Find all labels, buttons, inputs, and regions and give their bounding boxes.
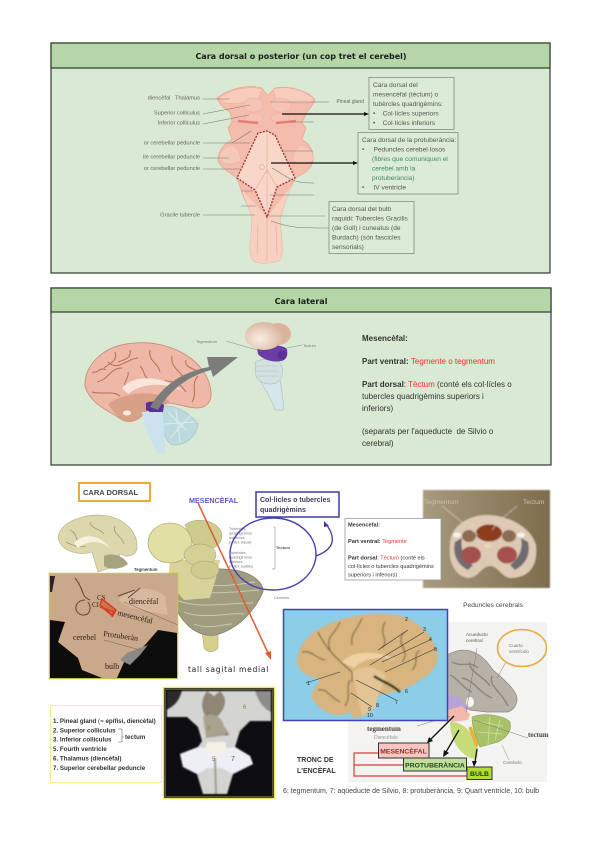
right sagittal brain illustration (348, 622, 547, 782)
list: numbered structures: 7. Superior cerebellar peduncle (53, 765, 146, 772)
dashed outline: fourth ventricle (237, 131, 295, 217)
tag: bulb (467, 767, 492, 780)
bracket: tronc de l'encèfal (354, 753, 467, 776)
callout: bulb: raquidi: Tubercles Gracilis (332, 216, 409, 222)
label: tectum: Tectum (303, 343, 317, 348)
callout: tectum: • Col·lícles inferiors (373, 120, 436, 127)
labels: specimen numbers: 2 (206, 712, 209, 718)
label: tegmentum: Tegmentum (134, 567, 158, 572)
illustration: isolated brainstem (226, 322, 302, 410)
heading: cara dorsal (51, 43, 550, 68)
left labels: Pineal gland (336, 99, 364, 105)
heading: cara dorsal: Cara dorsal o posterior (un cop tret el cerebel) (195, 52, 407, 61)
caption: numbered legend: 6: tegmentum, 7: aqüeducte de Silvio, 8: protuberància, 9: Quart ventricle, 10: bulb (283, 788, 539, 795)
labels on cross-section: Tectum (523, 499, 545, 506)
callout: bulb: (de Goll) i cuneatus (de (332, 225, 401, 232)
callout: tectum: mesencèfal (téctum) o (373, 92, 439, 98)
left labels: or cerebellar peduncle (144, 166, 200, 172)
labels: numbers: 6 (405, 689, 408, 695)
labels: numbers: 8 (376, 703, 379, 709)
labels: right illustration: tegmentum (367, 725, 401, 733)
callout: mesencèfal summary: col·lícles o tubercles quadrigèmins (348, 564, 434, 570)
label: protuberància: Protuberàn (103, 629, 139, 643)
callout: col·licles o tubercles quadrigèmins: Col·licles o tubercles (260, 497, 331, 504)
callout: mesencèfal summary: Mesencèfal: (348, 522, 380, 528)
heading: tronc de l'encèfal: TRONC DE (297, 757, 334, 764)
left labels: Inferior colliculus (158, 120, 200, 126)
labels: specimen numbers: 4 (225, 732, 228, 738)
arrow: curved to col·licles box (316, 521, 332, 556)
callout: tectum: Cara dorsal del (373, 82, 418, 89)
photo: sagittal brain in blue frame (284, 610, 448, 720)
tectum annotation: superiors (229, 536, 245, 540)
panel: cara dorsal o posterior (51, 43, 550, 273)
text block: mesencèfal: Part dorsal: Tèctum (conté els col·lícles o (362, 380, 512, 389)
text block: mesencèfal: (separats per l'aqueducte de Silvio o (362, 427, 494, 436)
text block: mesencèfal: inferiors) (362, 404, 393, 413)
photo: midbrain cross-section (423, 490, 550, 588)
label: bulb: bulb (105, 662, 119, 671)
callout: bulb: Cara dorsal del bulb (332, 206, 391, 213)
text block: mesencèfal: Mesencèfal: (362, 334, 408, 343)
arrow: to tectum box (282, 112, 369, 116)
left labels: Gracile tubercle (160, 212, 200, 218)
panel: cara lateral (51, 288, 551, 465)
labels: specimen numbers (206, 705, 247, 763)
labels: right illustration: Diencéfalo (374, 735, 398, 741)
labels: right illustration: Cuarto (509, 643, 523, 648)
list: numbered structures: 1. Pineal gland (= epífisi, diencèfal) (53, 718, 156, 725)
highlight: tectum ellipse (230, 518, 316, 590)
illustration: whole brain section (58, 515, 137, 572)
tectum annotation: quadrigèmins (229, 556, 252, 560)
callout: protuberance (358, 132, 458, 194)
tectum annotation: Tectum (276, 545, 290, 550)
tectum annotation: (reflex auditiu) (229, 564, 254, 568)
illustration: olive brainstem with cerebellum (148, 520, 263, 652)
illustration: sagittal brain (85, 343, 211, 453)
label: CS and CI: CS (97, 594, 106, 602)
labels: right illustration: tectum (528, 731, 549, 739)
label: tegmentum: Tegmentum (196, 339, 218, 344)
labels: numbers: 5 (434, 647, 437, 653)
labels: numbers: 2 (405, 617, 408, 623)
labels: right illustration: Cerebelo (503, 760, 522, 765)
photo: sagittal section in yellow frame (50, 574, 178, 678)
tag: mesencèfal: MESENCÈFAL (380, 746, 427, 756)
left labels: or cerebellar peduncle (144, 140, 200, 146)
list: numbered structures (50, 706, 162, 782)
labels: right illustration (367, 632, 549, 765)
labels on cross-section (424, 499, 545, 506)
highlight: colliculi (100, 599, 116, 617)
labels: numbers: 7 (395, 700, 398, 706)
heading: cara lateral (51, 288, 551, 312)
arrow: to protuberance box (271, 161, 358, 165)
label: cerebel: cerebel (73, 633, 97, 642)
labels: right illustration: cerebral (466, 638, 483, 643)
labels: specimen numbers: 5 (212, 757, 216, 763)
tectum annotation: Tubèrcles (229, 551, 246, 555)
tag: protuberància: PROTUBERÀNCIA (405, 760, 465, 770)
left labels (143, 96, 364, 218)
list: numbered structures: 6. Thalamus (diencèfal) (53, 756, 121, 762)
arrow: to mesencèfal tag (427, 716, 454, 743)
labels on cross-section: Tegmentum (424, 499, 459, 506)
list: numbered structures: 2. Superior colliculus (53, 728, 116, 734)
labels: numbers (307, 617, 437, 719)
labels: numbers: 3 (423, 627, 426, 633)
labels: numbers: 10 (367, 713, 373, 719)
labels: numbers: 1 (307, 681, 310, 687)
label: cara dorsal: CARA DORSAL (83, 488, 139, 497)
photo: dorsal brainstem specimen (164, 688, 274, 798)
arrow: to protuberància tag (443, 730, 459, 757)
labels: specimen numbers: 3 (207, 726, 211, 732)
text block: mesencèfal: cerebral) (362, 439, 394, 448)
tag: mesencèfal (378, 743, 429, 758)
callout: col·licles o tubercles quadrigèmins: quadrigèmins (260, 507, 306, 514)
label: diencèfal: diencèfal (129, 597, 159, 606)
callout: bulb: Burdach) (són fascicles (332, 234, 401, 242)
left labels: diencèfal Thalamus (148, 96, 200, 102)
arrow: red sagittal plane (198, 503, 271, 660)
callout: protuberance: Cara dorsal de la protuberància: (362, 137, 456, 144)
heading: tronc de l'encèfal: L'ENCÈFAL (297, 766, 336, 775)
text block: mesencèfal (362, 334, 512, 448)
list: numbered structures: 3. Inferior colliculus (53, 736, 112, 744)
highlight: cuarto ventrículo ellipse (498, 630, 546, 666)
tectum annotation: Tubèrcles (229, 527, 246, 531)
tag: protuberància (404, 758, 466, 771)
label: cara dorsal (79, 483, 150, 501)
callout: protuberance: protuberància) (372, 175, 415, 182)
callout: protuberance: • IV ventricle (362, 184, 406, 192)
labels: numbers: 9 (368, 707, 371, 713)
heading: mesencèfal: MESENCÈFAL (189, 496, 239, 505)
callout: bulb: sensorials) (332, 244, 364, 251)
callout: tectum: tubèrcles quadrigèmins: (373, 101, 443, 108)
callout: protuberance: cerebel amb la (372, 166, 416, 172)
labels: numbers: 4 (429, 637, 432, 643)
labels: specimen numbers: 7 (231, 756, 235, 763)
list: numbered structures: 5. Fourth ventricle (53, 746, 107, 753)
left labels: Superior colliculus (154, 110, 200, 116)
label: CS and CI: CI (92, 601, 100, 609)
caption: tall sagital medial: tall sagital medial (188, 665, 269, 674)
labels: right illustration: ventrículo (509, 649, 529, 654)
tectum annotation: quadrigèmins (229, 532, 252, 536)
arrow: brain to brainstem (150, 357, 238, 410)
heading: cara lateral: Cara lateral (275, 297, 328, 306)
callout: mesencèfal summary: superiors i inferiors) (348, 572, 397, 578)
callout: mesencèfal summary: Part ventral: Tegmente (348, 539, 407, 545)
arrow: to bulb tag (472, 749, 477, 767)
labels: right illustration: Acueducto (466, 632, 488, 637)
list: numbered structures: tectum (125, 734, 146, 741)
tectum annotation (229, 527, 290, 600)
leader lines (203, 99, 329, 228)
tectum annotation: (reflex visual) (229, 540, 252, 544)
callout: protuberance: • Peduncles cerebel·losos (362, 146, 446, 154)
diagram: dorsal brainstem (203, 87, 329, 263)
text block: mesencèfal: Part ventral: Tegmente o tegmentum (362, 357, 495, 366)
tectum annotation: Cerebelo (274, 596, 289, 600)
text block: mesencèfal: tubercles quadrigèmins superiors i (362, 392, 484, 401)
callout: tectum (369, 78, 454, 130)
callout: mesencèfal summary: Part dorsal: Tèctum (conté els (348, 556, 425, 562)
labels: specimen numbers: 6 (243, 705, 247, 711)
left labels: lle cerebellar peduncle (143, 154, 200, 160)
label: mesencèfal: mesencèfal (117, 608, 154, 626)
callout: bulb (329, 202, 414, 254)
callout: col·licles o tubercles quadrigèmins (256, 492, 339, 517)
callout: tectum: • Col·lícles superiors (373, 110, 439, 118)
caption: peduncles cerebrals: Peduncles cerebrals (463, 602, 524, 609)
tectum annotation: inferiors (229, 560, 243, 564)
tag: bulb: BULB (470, 771, 489, 778)
heading: tronc de l'encèfal (297, 757, 336, 775)
callout: protuberance: (fibres que comuniquen el (372, 156, 448, 163)
callout: mesencèfal summary (345, 518, 441, 580)
